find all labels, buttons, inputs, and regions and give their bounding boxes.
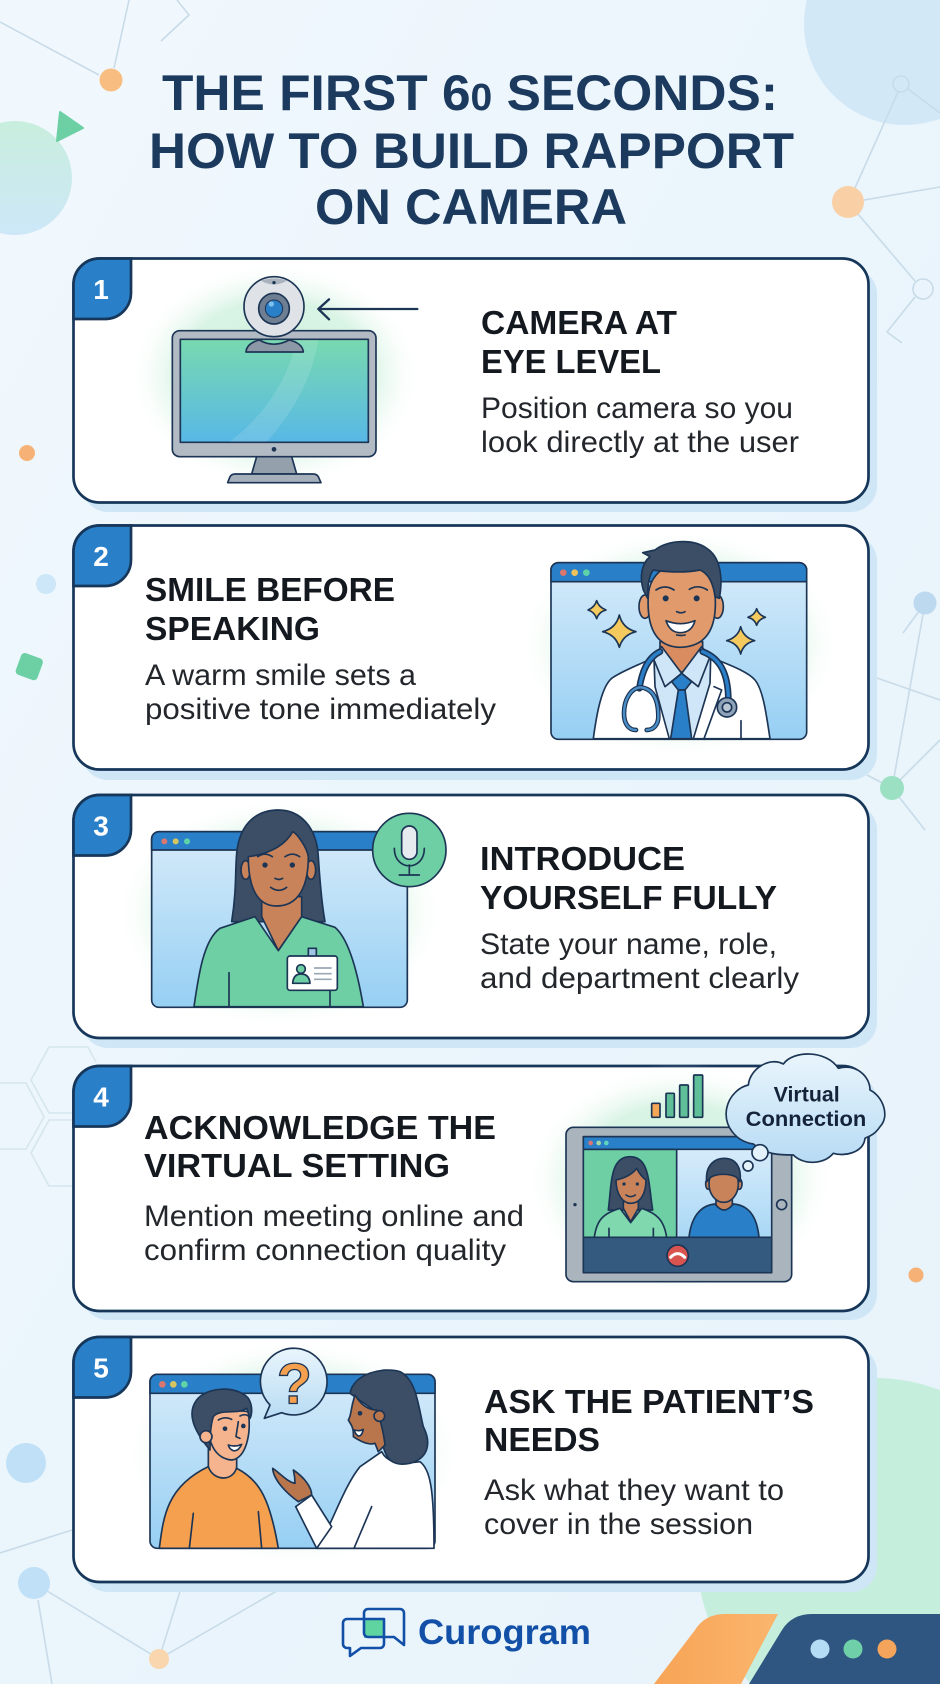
- step 3 heading: INTRODUCE: [480, 840, 685, 877]
- panel: step 3 introduce yourself fully: [74, 795, 877, 1048]
- signal bars: [652, 1075, 703, 1117]
- number badge 4: 4: [93, 1082, 109, 1112]
- title: ON CAMERA: [315, 179, 627, 235]
- step 5 heading: ASK THE PATIENT’S: [484, 1383, 814, 1420]
- step 2 heading: SMILE BEFORE: [145, 571, 395, 608]
- number badge 3: 3: [93, 810, 109, 842]
- tablet: [566, 1127, 792, 1282]
- question mark speech bubble: [260, 1348, 327, 1418]
- step 2 description: positive tone immediately: [145, 693, 496, 726]
- step 3 description: [480, 928, 799, 995]
- thought cloud: virtual connection: Virtual: [774, 1082, 840, 1106]
- step 1 heading: EYE LEVEL: [481, 343, 661, 380]
- ID badge: [287, 948, 337, 990]
- step 2 description: A warm smile sets a: [145, 659, 416, 692]
- title: [149, 65, 794, 235]
- step 1 description: Position camera so you: [481, 392, 793, 425]
- step 2 heading: [145, 571, 395, 647]
- number badge 1: [74, 258, 131, 319]
- panel: step 1 camera at eye level: [74, 258, 877, 512]
- illustration: smiling doctor in video window: [517, 527, 843, 760]
- thought cloud: virtual connection: [726, 1054, 885, 1171]
- step 3 heading: YOURSELF FULLY: [480, 879, 777, 916]
- step 5 description: [484, 1474, 784, 1541]
- number badge 1: 1: [93, 274, 109, 305]
- hang up button: [667, 1245, 688, 1266]
- arrow pointing to webcam: [318, 299, 417, 319]
- number badge 2: 2: [93, 541, 109, 572]
- illustration: patient and clinician conversation with question bubble: [123, 1338, 463, 1568]
- step 4 heading: VIRTUAL SETTING: [144, 1147, 450, 1184]
- panel: step 2 smile before speaking: [74, 526, 877, 780]
- title: HOW TO BUILD RAPPORT: [149, 123, 794, 179]
- illustration: tablet video call with signal bars and thought cloud: [523, 1054, 885, 1297]
- number badge 5: [74, 1337, 131, 1398]
- number badge 5: 5: [93, 1352, 109, 1384]
- clinician: [273, 1370, 434, 1548]
- step 1 heading: [481, 304, 677, 380]
- number badge 3: [74, 795, 131, 856]
- step 4 description: [144, 1200, 524, 1267]
- step 4 heading: ACKNOWLEDGE THE: [144, 1109, 496, 1146]
- number badge 4: [74, 1066, 131, 1126]
- step 5 description: cover in the session: [484, 1508, 753, 1541]
- step 3 description: State your name, role,: [480, 928, 777, 961]
- patient: [159, 1389, 278, 1548]
- thought cloud: virtual connection: Connection: [746, 1107, 866, 1131]
- step 4 description: confirm connection quality: [144, 1234, 506, 1267]
- step 5 heading: [484, 1383, 814, 1458]
- number badge 2: [74, 526, 131, 586]
- panel: step 4 acknowledge the virtual setting: [74, 1054, 885, 1320]
- logo: Curogram: [343, 1609, 591, 1656]
- corner accent: orange and navy panels with dots: [654, 1614, 940, 1684]
- step 5 description: Ask what they want to: [484, 1474, 784, 1507]
- logo: Curogram: Curogram: [418, 1613, 591, 1652]
- step 3 heading: [480, 840, 777, 916]
- question mark speech bubble: ?: [277, 1352, 312, 1416]
- step 1 heading: CAMERA AT: [481, 304, 677, 341]
- title: THE FIRST 60 SECONDS:: [162, 65, 778, 121]
- step 1 description: [481, 392, 799, 459]
- illustration: monitor with webcam: [127, 260, 423, 490]
- step 1 description: look directly at the user: [481, 426, 799, 459]
- step 2 heading: SPEAKING: [145, 610, 320, 647]
- step 4 description: Mention meeting online and: [144, 1200, 524, 1233]
- microphone icon: [373, 813, 446, 887]
- panel: step 5 ask the patient's needs: [74, 1337, 877, 1592]
- illustration: woman in scrubs with ID badge and microphone: [113, 797, 447, 1030]
- step 4 heading: [144, 1109, 496, 1184]
- step 3 description: and department clearly: [480, 962, 799, 995]
- step 5 heading: NEEDS: [484, 1421, 600, 1458]
- step 2 description: [145, 659, 496, 726]
